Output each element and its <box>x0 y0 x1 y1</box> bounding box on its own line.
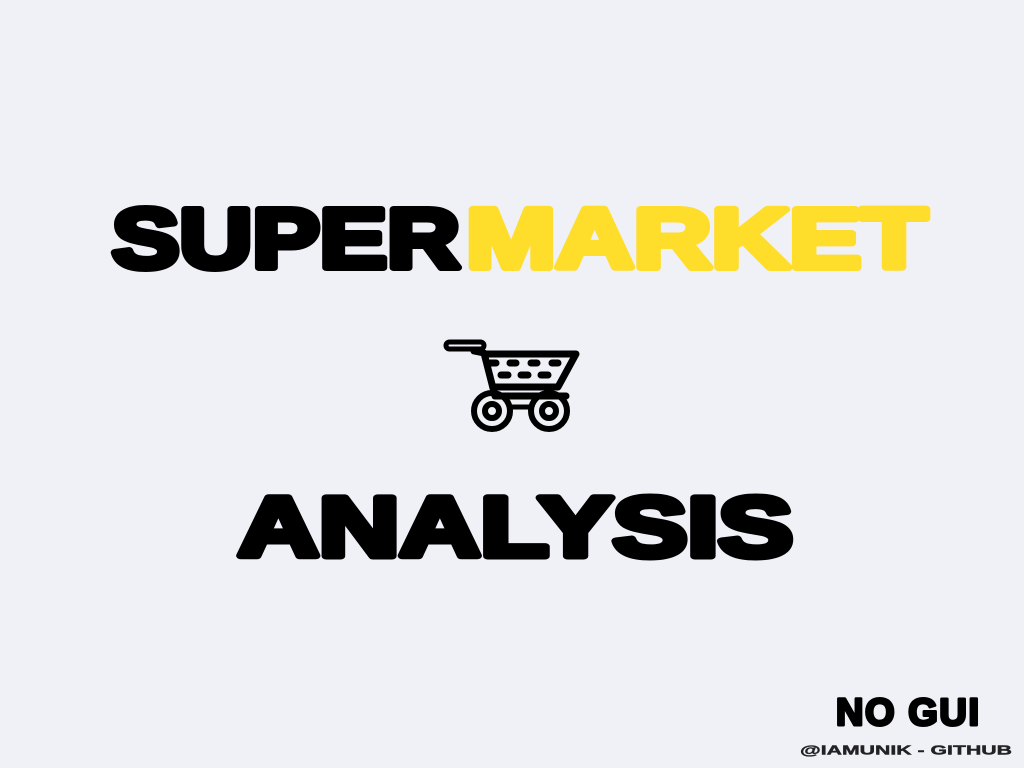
title: SUPERMARKET <box>112 192 927 286</box>
title word: SUPER: SUPER <box>112 192 460 286</box>
signature: NO GUI: NO GUI <box>836 692 979 734</box>
credit: @IAMUNIK - GITHUB: @IAMUNIK - GITHUB <box>800 742 1012 758</box>
icon: shopping cart <box>446 342 576 429</box>
title word: MARKET: MARKET <box>466 192 927 286</box>
heading: ANALYSIS: ANALYSIS <box>238 480 793 574</box>
